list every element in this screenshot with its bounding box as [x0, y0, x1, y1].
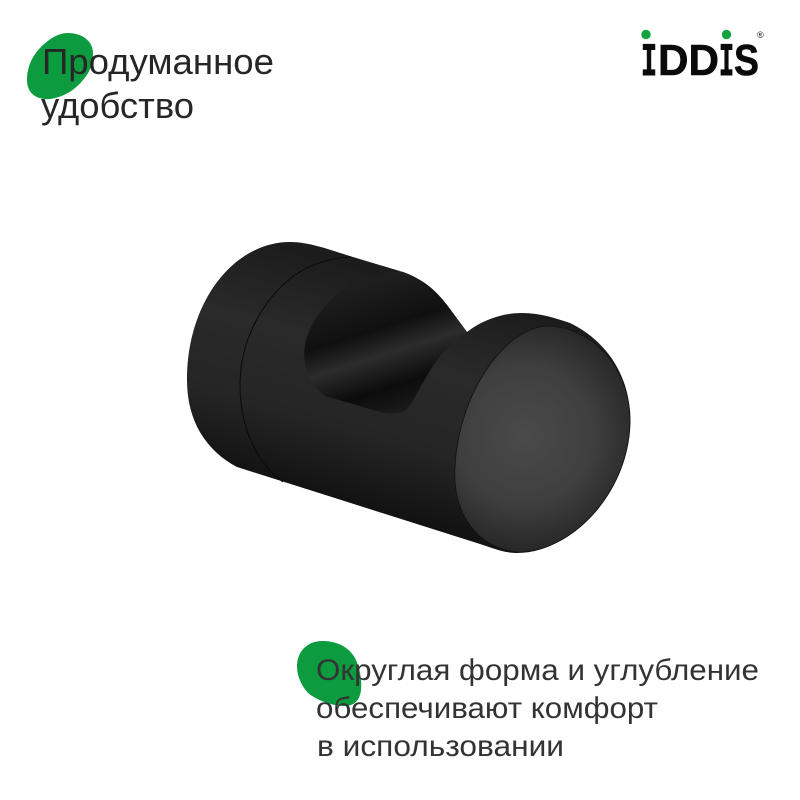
product: matte black hook	[187, 242, 630, 553]
head face	[455, 326, 630, 552]
heading with green blob	[27, 33, 284, 126]
logo letters DD: DD	[658, 36, 719, 85]
base seam	[240, 257, 351, 482]
hook recess	[304, 271, 467, 414]
caption with green blob	[297, 641, 767, 763]
IDDIS logo	[641, 30, 764, 89]
caption text: в использовании	[317, 730, 564, 763]
heading text: удобство	[41, 85, 194, 126]
caption text: Округлая форма и углубление	[316, 654, 759, 687]
logo green dot left	[641, 30, 651, 39]
registered mark: ®	[757, 30, 764, 40]
logo letter I: I	[641, 37, 657, 89]
logo letter I second: I	[719, 37, 734, 89]
hook body	[187, 242, 630, 553]
green blob behind heading	[27, 33, 93, 99]
logo letter S: S	[734, 36, 759, 85]
caption text: обеспечивают комфорт	[316, 692, 658, 725]
green blob behind caption	[297, 641, 361, 706]
logo green dot right	[722, 30, 731, 39]
heading text: Продуманное	[42, 41, 274, 82]
